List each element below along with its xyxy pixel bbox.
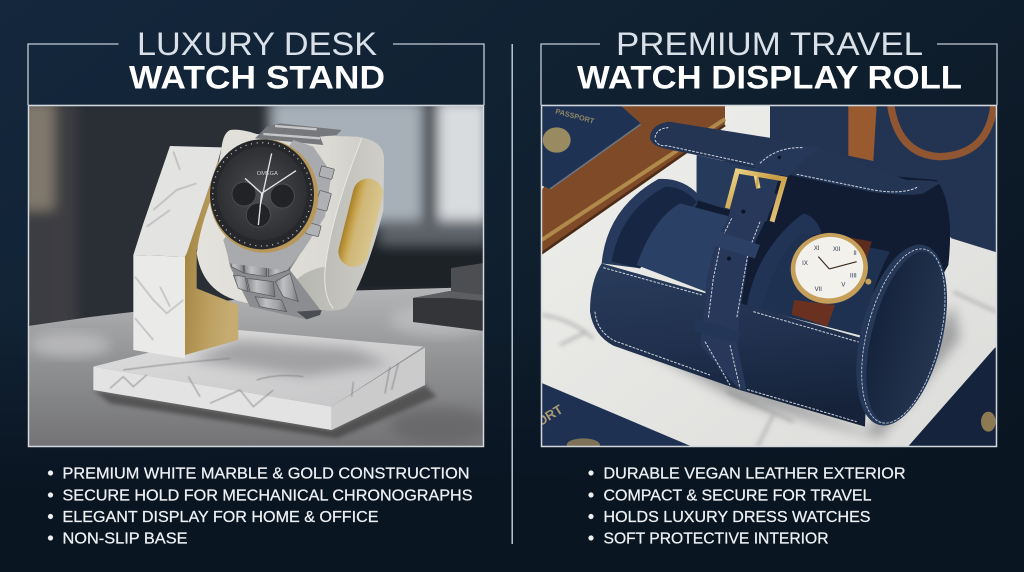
gold buckle xyxy=(727,171,784,222)
stacked dark blocks xyxy=(413,263,484,331)
cushion roller xyxy=(197,130,384,310)
feature list: roll: COMPACT & SECURE FOR TRAVEL xyxy=(604,487,872,504)
passport bottom right xyxy=(905,348,1000,450)
feature list: stand: NON-SLIP BASE xyxy=(62,530,188,547)
feature list: roll xyxy=(588,466,906,547)
brown leather wallet xyxy=(542,105,725,253)
keeper loops xyxy=(715,232,760,258)
watch in roll: II xyxy=(853,251,857,257)
feature list: stand: SECURE HOLD FOR MECHANICAL CHRONOGRAPHS xyxy=(62,487,472,504)
top flap xyxy=(650,122,942,195)
back suede wall xyxy=(697,155,780,222)
table top xyxy=(28,287,484,447)
feature list: stand: ELEGANT DISPLAY FOR HOME & OFFICE xyxy=(62,509,378,526)
heading: premium travel watch display roll xyxy=(577,26,962,96)
marble base xyxy=(93,330,425,430)
watch in roll: XI xyxy=(814,246,820,252)
left cushion xyxy=(637,203,730,293)
navy travel roll xyxy=(590,122,964,435)
watch in roll: VII xyxy=(815,287,822,293)
passport bottom left xyxy=(534,382,700,452)
right compartment rim xyxy=(747,213,822,310)
base shadow xyxy=(93,385,437,438)
watch in roll: IX xyxy=(802,261,808,267)
watch in roll xyxy=(786,228,873,327)
center divider xyxy=(512,44,513,544)
heading: luxury desk watch stand: LUXURY DESK xyxy=(137,26,377,62)
feature list: roll: HOLDS LUXURY DRESS WATCHES xyxy=(604,509,870,526)
interior wall xyxy=(694,158,950,310)
heading frame xyxy=(28,44,484,106)
blurred room backdrop xyxy=(29,106,483,326)
vertical strap with buckle xyxy=(695,147,802,392)
photo: marble watch stand xyxy=(20,100,490,447)
heading: premium travel watch display roll: WATCH DISPLAY ROLL xyxy=(577,60,962,96)
roll ground shadow xyxy=(648,305,966,444)
passport top left: PASSPORT xyxy=(554,107,596,126)
right cushion xyxy=(762,233,890,337)
marble surface xyxy=(540,105,1000,450)
navy bag with tan strap xyxy=(770,105,1000,253)
marble stand illustration xyxy=(93,123,437,438)
front panel xyxy=(590,263,868,427)
passport bottom left: ORT xyxy=(534,402,565,429)
pushers xyxy=(305,166,334,237)
hands xyxy=(245,153,296,225)
watch in roll: V xyxy=(841,283,845,289)
case lugs xyxy=(223,140,332,271)
feature list: roll: SOFT PROTECTIVE INTERIOR xyxy=(604,530,828,547)
passport top left xyxy=(540,105,641,189)
feature list: stand: PREMIUM WHITE MARBLE & GOLD CONSTRUCTION xyxy=(62,466,470,483)
panel: luxury desk watch stand xyxy=(20,26,490,547)
right end cap xyxy=(856,244,948,426)
gold oval plate xyxy=(338,178,383,267)
photo border xyxy=(542,106,996,446)
steel chronograph watch xyxy=(210,123,342,319)
feature list: stand xyxy=(48,466,472,547)
feature list: roll: DURABLE VEGAN LEATHER EXTERIOR xyxy=(604,466,906,483)
heading: luxury desk watch stand: WATCH STAND xyxy=(129,60,385,96)
heading: luxury desk watch stand xyxy=(129,26,385,96)
heading: premium travel watch display roll: PREMIUM TRAVEL xyxy=(616,26,923,62)
photo border xyxy=(28,106,484,446)
heading frame xyxy=(541,44,997,106)
subdials xyxy=(232,182,294,227)
watch in roll: IIII xyxy=(850,274,857,280)
watch in roll: XII xyxy=(833,247,841,253)
bracelet xyxy=(227,123,342,319)
panel: premium travel watch display roll xyxy=(534,26,1000,547)
photo: leather watch roll xyxy=(534,105,1000,452)
left opening rim xyxy=(602,179,699,268)
gold support xyxy=(185,160,238,355)
steel chronograph watch: OMEGA xyxy=(257,171,278,177)
marble upright xyxy=(133,146,222,358)
bezel and case xyxy=(210,139,318,253)
